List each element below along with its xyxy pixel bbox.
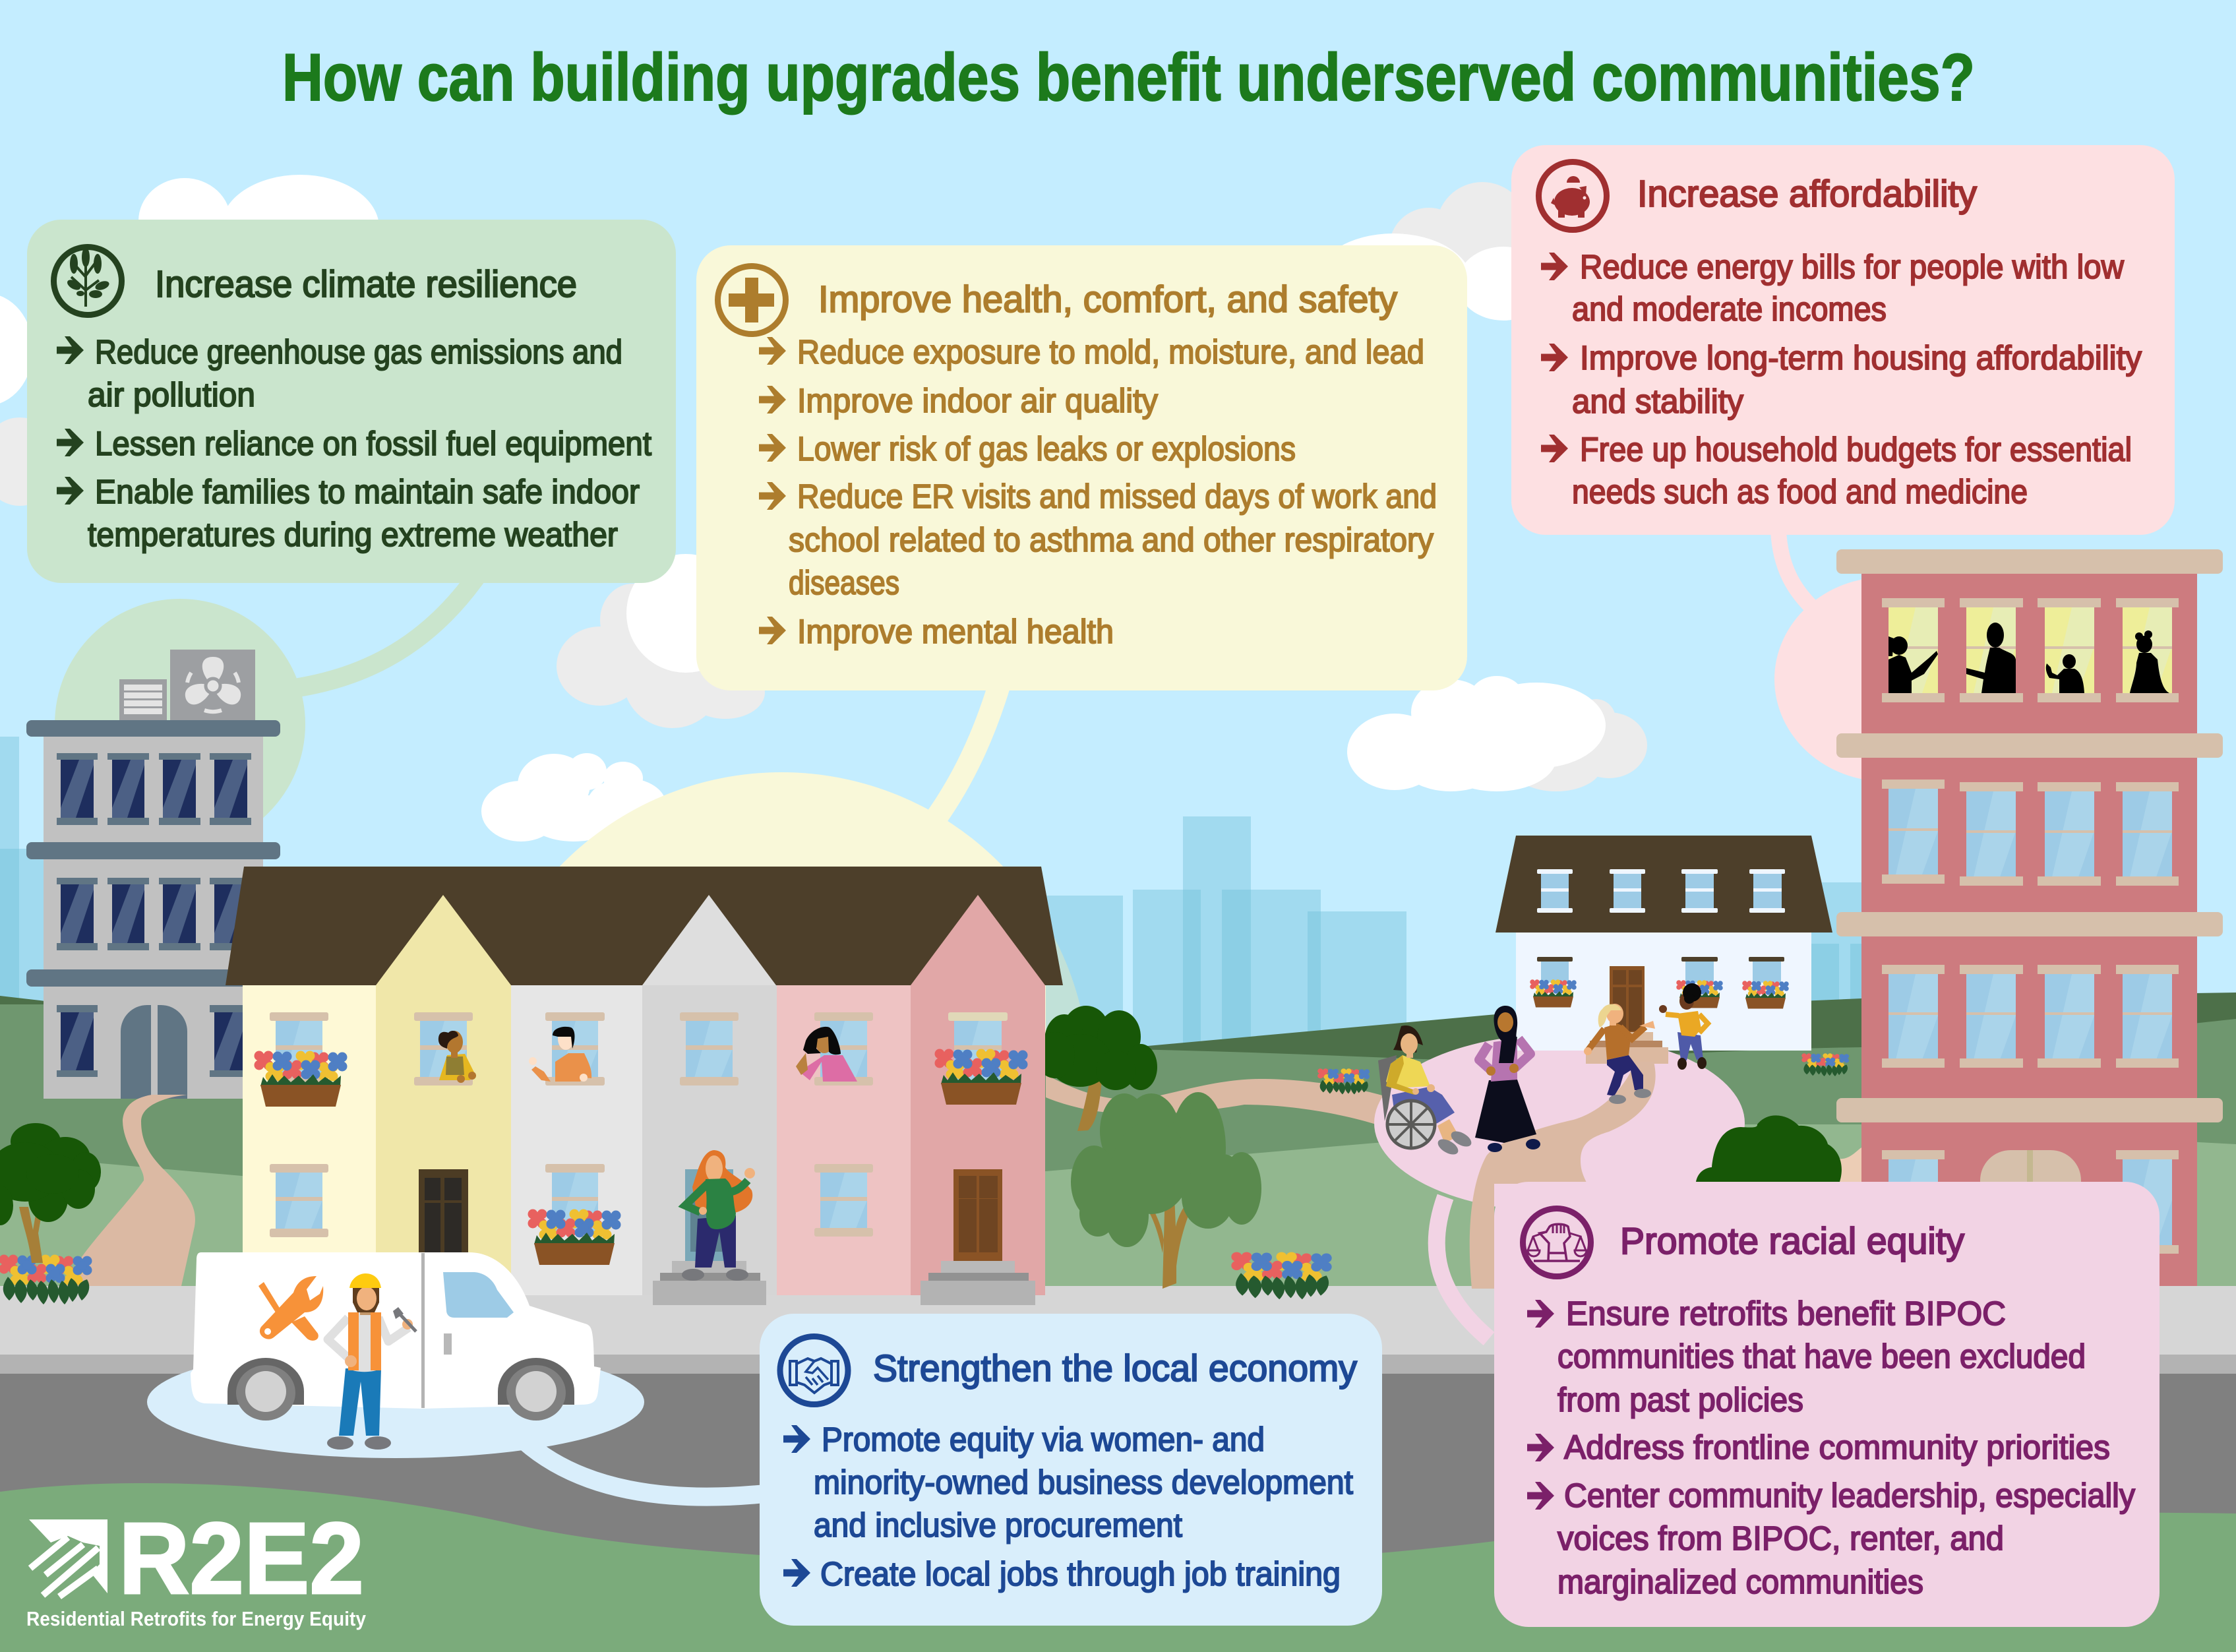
panel: climate resilience bbox=[27, 220, 676, 583]
bullet: housing affordability: Improve long-term housing affordability bbox=[1580, 339, 2142, 377]
bullet: energy bills bbox=[1541, 248, 2124, 328]
bullet: greenhouse gas: Reduce greenhouse gas emissions and bbox=[95, 333, 622, 371]
worker with wrench bbox=[327, 1273, 416, 1450]
blonde person running bbox=[1584, 1004, 1654, 1104]
heading: Increase affordability bbox=[1637, 173, 1977, 215]
icon: piggy bank bbox=[1539, 162, 1606, 229]
bullet: community leadership: marginalized communities bbox=[1557, 1563, 1923, 1601]
hills bbox=[0, 993, 2236, 1293]
ground flowers bbox=[0, 1053, 1849, 1304]
bullet: community leadership: Center community leadership, especially bbox=[1564, 1477, 2135, 1514]
heading: Improve health, comfort, and safety bbox=[818, 278, 1397, 321]
bullet: frontline priorities: Address frontline community priorities bbox=[1564, 1428, 2110, 1466]
bullet: safe temperatures: Enable families to maintain safe indoor bbox=[95, 473, 640, 510]
logo: R2E2: R2E2 bbox=[119, 1502, 364, 1615]
logo: R2E2 bbox=[26, 1502, 367, 1630]
tree: left bbox=[0, 1123, 101, 1263]
child bbox=[1659, 983, 1708, 1070]
bullet: energy bills: and moderate incomes bbox=[1572, 290, 1887, 328]
bullet: community leadership: voices from BIPOC, renter, and bbox=[1557, 1519, 2004, 1557]
foreground grass bbox=[0, 1483, 2236, 1652]
bullet: air quality: Improve indoor air quality bbox=[797, 382, 1158, 419]
bullet: ER visits: school related to asthma and other respiratory bbox=[789, 521, 1434, 559]
grey apartment building bbox=[26, 720, 280, 1099]
bullet: BIPOC benefit: communities that have been excluded bbox=[1557, 1337, 2086, 1375]
bullet: women and minority-owned: minority-owned business development bbox=[814, 1463, 1353, 1501]
white service van bbox=[191, 1252, 601, 1421]
bullet: ER visits: Reduce ER visits and missed days of work and bbox=[797, 477, 1437, 515]
bush bbox=[1696, 1115, 1861, 1187]
logo: R2E2: Residential Retrofits for Energy Equity bbox=[26, 1607, 367, 1630]
bullet: safe temperatures bbox=[57, 473, 640, 553]
bullet: women and minority-owned: Promote equity via women- and bbox=[822, 1421, 1265, 1458]
silhouettes in lit windows bbox=[1889, 623, 2169, 693]
woman in hijab bbox=[1475, 1006, 1540, 1152]
bullet: housing affordability: and stability bbox=[1572, 382, 1743, 420]
title: How can building upgrades benefit underserved communities? bbox=[282, 41, 1975, 115]
callout spot: climate resilience bbox=[55, 577, 476, 849]
person in pink house window bbox=[796, 1027, 857, 1082]
bullet: ER visits bbox=[759, 477, 1437, 601]
bullet: BIPOC benefit bbox=[1527, 1295, 2086, 1419]
path by grey building continued bbox=[123, 1095, 187, 1121]
icon: medical cross bbox=[717, 266, 786, 334]
person in grey house window bbox=[529, 1027, 591, 1082]
woman in wheelchair bbox=[1378, 1025, 1474, 1157]
bullet: gas leaks: Lower risk of gas leaks or explosions bbox=[797, 430, 1296, 468]
person in yellow house window bbox=[438, 1031, 476, 1083]
flower boxes on row houses bbox=[255, 1049, 1027, 1265]
icon: crossed tools on van bbox=[258, 1276, 323, 1341]
row houses bbox=[226, 867, 1063, 1305]
garden paths bbox=[63, 1074, 1385, 1286]
skyline bbox=[0, 737, 1861, 1067]
ground: sidewalk, curb and road bbox=[0, 1286, 2236, 1652]
path across pink spot bbox=[1470, 1062, 1656, 1289]
bullet: BIPOC benefit: Ensure retrofits benefit BIPOC bbox=[1566, 1295, 2006, 1332]
bullet: women and minority-owned: and inclusive procurement bbox=[814, 1506, 1182, 1544]
bullet: energy bills: Reduce energy bills for people with low bbox=[1580, 248, 2124, 286]
panel: racial equity bbox=[1494, 1182, 2160, 1627]
bullet: community leadership bbox=[1527, 1477, 2135, 1601]
bullet: BIPOC benefit: from past policies bbox=[1557, 1381, 1803, 1419]
rooftop HVAC units bbox=[119, 650, 255, 720]
brick apartment tower bbox=[1836, 549, 2223, 1286]
bullet: household budgets bbox=[1541, 431, 2132, 510]
bullet: ER visits: diseases bbox=[789, 564, 899, 601]
heading: Strengthen the local economy bbox=[873, 1347, 1357, 1390]
bullet: greenhouse gas: air pollution bbox=[88, 376, 255, 413]
bullet: greenhouse gas bbox=[57, 333, 622, 413]
callout spot: local economy bbox=[147, 1346, 765, 1497]
small white house bbox=[1496, 836, 1832, 1064]
icon: R2E2 arrow mark bbox=[29, 1519, 107, 1597]
woman at front door bbox=[682, 1150, 755, 1281]
panel: local economy bbox=[760, 1314, 1382, 1626]
bullet: mental health: Improve mental health bbox=[797, 613, 1114, 650]
callout spot: racial equity bbox=[1374, 1034, 1745, 1339]
tree: centre bbox=[1071, 1092, 1261, 1289]
bullet: housing affordability bbox=[1541, 339, 2142, 420]
bullet: household budgets: needs such as food and medicine bbox=[1572, 473, 2028, 510]
panel: health, comfort, safety bbox=[696, 245, 1467, 690]
sun and callout stem to health panel bbox=[473, 686, 1089, 1388]
heading: Increase climate resilience bbox=[155, 263, 577, 305]
panel: affordability bbox=[1511, 145, 2175, 535]
bullet: local jobs: Create local jobs through job training bbox=[820, 1555, 1341, 1593]
bullet: household budgets: Free up household budgets for essential bbox=[1580, 431, 2132, 468]
bullet: mold: Reduce exposure to mold, moisture, and lead bbox=[797, 333, 1424, 371]
icon: fist and scales bbox=[1523, 1208, 1590, 1277]
tree behind row houses bbox=[1035, 1006, 1157, 1131]
callout spot: affordability bbox=[1774, 531, 1997, 781]
icon: plant bbox=[54, 247, 121, 315]
bullet: women and minority-owned bbox=[783, 1421, 1353, 1544]
bullet: safe temperatures: temperatures during extreme weather bbox=[88, 516, 618, 553]
clouds bbox=[0, 175, 1647, 841]
bullet: fossil fuel: Lessen reliance on fossil fuel equipment bbox=[95, 425, 651, 462]
icon: handshake bbox=[780, 1336, 848, 1405]
heading: Promote racial equity bbox=[1620, 1220, 1964, 1262]
